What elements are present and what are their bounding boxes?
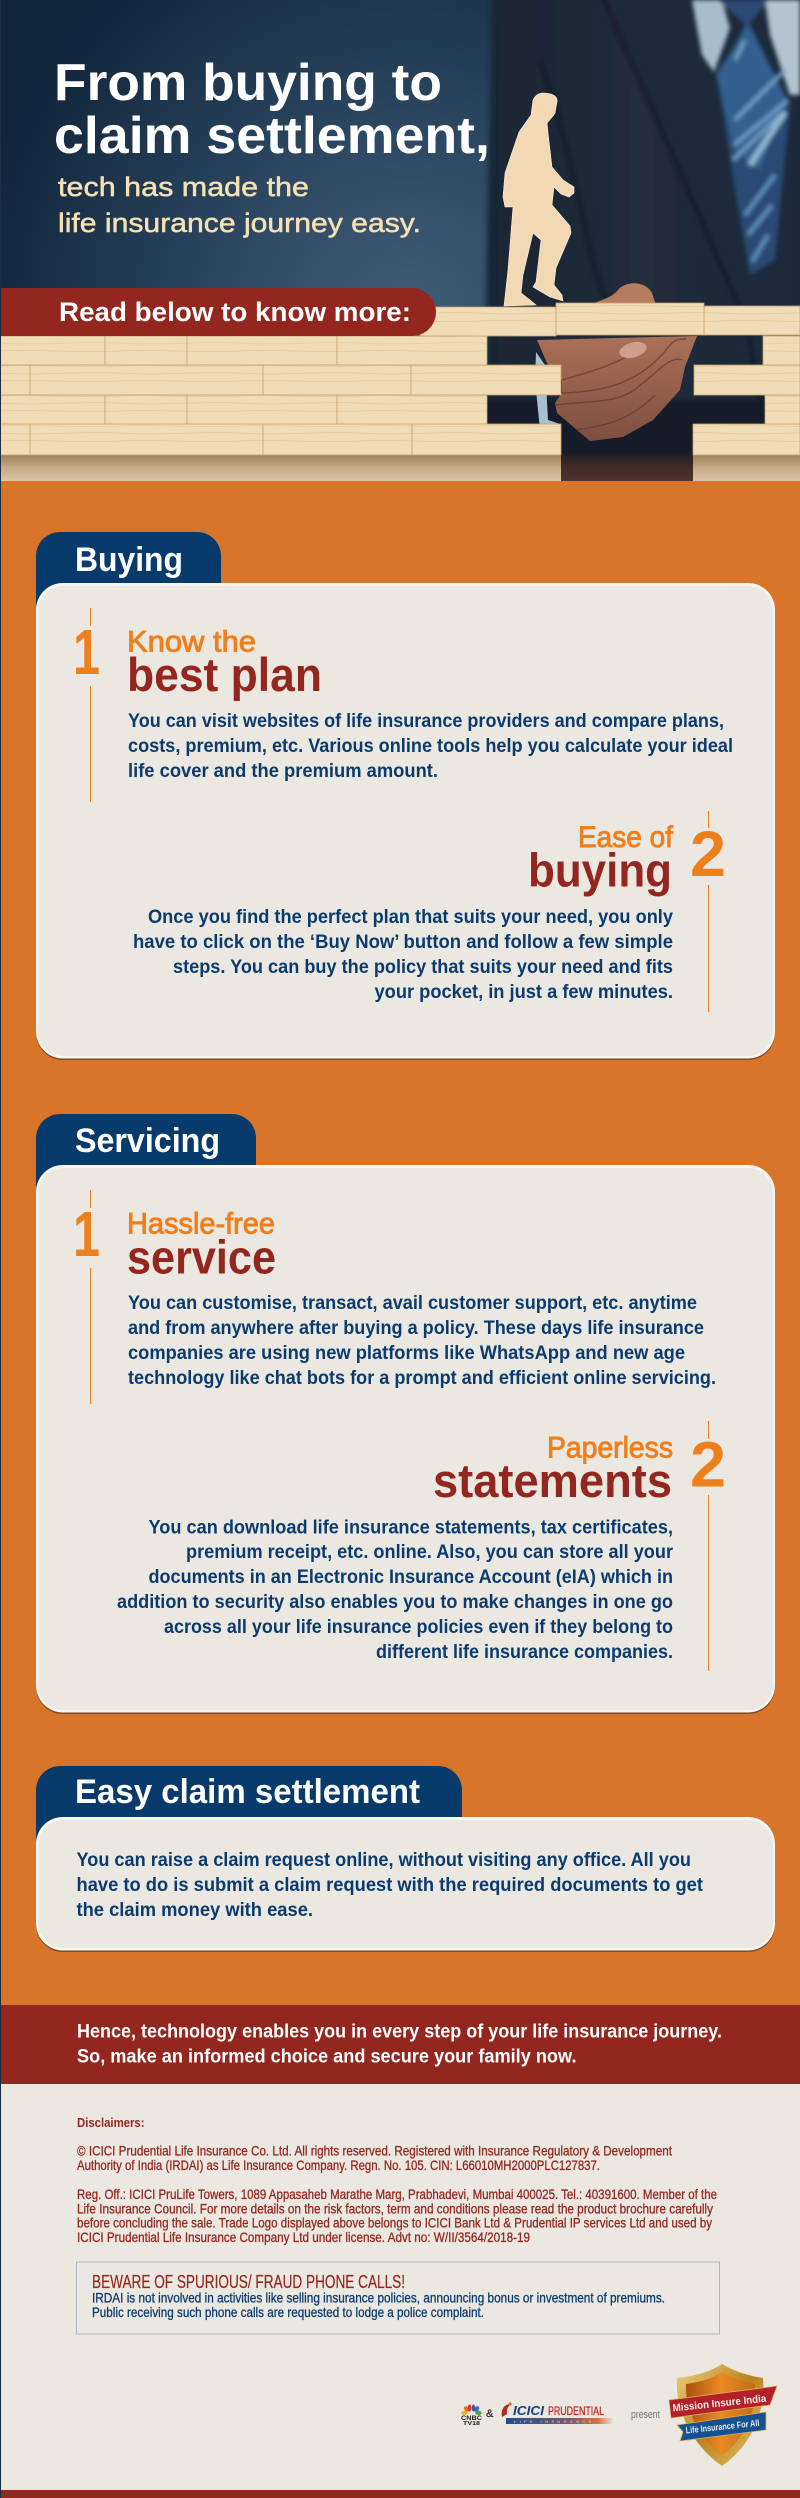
item 2: Ease of buying: 2: [690, 818, 726, 890]
ampersand: &: [486, 2408, 494, 2420]
title: [56, 62, 486, 161]
item 2: Ease of buying: steps. You can buy the policy that suits your need and fits: [173, 956, 673, 978]
item 1: Hassle-free service: and from anywhere after buying a policy. These days life insurance: [128, 1317, 704, 1339]
item 2: Paperless statements: addition to security also enables you to make changes in one go: [117, 1591, 673, 1613]
item 2: Paperless statements: statements: [433, 1454, 672, 1507]
closing message band: [0, 2005, 800, 2084]
item 2: Ease of buying: have to click on the ‘Buy Now’ button and follow a few simple: [133, 931, 673, 953]
orange background: [0, 481, 800, 2005]
fraud warning box: IRDAI is not involved in activities like selling insurance policies, announcing bonus or investment of premiums.: [92, 2290, 665, 2306]
closing message band: So, make an informed choice and secure your family now.: [77, 2046, 576, 2068]
hand behind brick: [535, 283, 697, 441]
wooden figure walking: [503, 93, 574, 306]
item 1: Hassle-free service: 1: [73, 1198, 100, 1270]
item 1: Hassle-free service: companies are using new platforms like WhatsApp and new age: [128, 1342, 685, 1364]
logo: ICICI Prudential: PRUDENTIAL: [548, 2404, 604, 2418]
card: Servicing: [36, 1165, 775, 1714]
left edge line: [0, 0, 1, 2498]
item 1: Hassle-free service: service: [127, 1230, 276, 1284]
section: Easy claim settlement: [36, 1766, 775, 1952]
item 2: Paperless statements: premium receipt, etc. online. Also, you can store all your: [186, 1541, 673, 1563]
tab: Easy claim settlement: [36, 1766, 462, 1850]
item 1: Know the best plan: Know the: [127, 626, 256, 658]
card: Easy claim settlement: [36, 1817, 775, 1952]
word: present: present: [631, 2409, 660, 2421]
copyright text: [77, 2143, 672, 2173]
section: Servicing: [36, 1114, 775, 1714]
item 2: Ease of buying: [133, 811, 726, 1012]
fraud warning box: [76, 2262, 720, 2334]
section: Buying: [36, 532, 775, 1060]
tab: Buying: [36, 532, 221, 620]
table reflection: [1, 455, 800, 481]
title: claim settlement,: [54, 107, 490, 165]
item 1: Know the best plan: life cover and the premium amount.: [128, 760, 438, 782]
item 2: Paperless statements: 2: [690, 1428, 726, 1500]
logo: CNBC TV18: TV18: [463, 2421, 480, 2427]
bottom bar: [0, 2490, 800, 2498]
item 2: Ease of buying: your pocket, in just a few minutes.: [374, 981, 673, 1003]
tab: Servicing: Servicing: [75, 1122, 220, 1160]
logo: ICICI Prudential: LIFE INSURANCE: [514, 2419, 595, 2424]
card: Buying: [36, 583, 775, 1060]
logo: ICICI Prudential: ICICI: [513, 2404, 545, 2418]
disclaimer panel: [0, 2084, 800, 2490]
item 2: Paperless statements: documents in an Electronic Insurance Account (eIA) which in: [148, 1566, 673, 1588]
logo: ICICI Prudential: [502, 2402, 614, 2424]
copyright text: © ICICI Prudential Life Insurance Co. Ltd. All rights reserved. Registered with Insurance Regulatory & Development: [77, 2143, 672, 2159]
item 2: Paperless statements: Paperless: [547, 1432, 673, 1464]
title: From buying to: [54, 54, 442, 112]
item 1: Know the best plan: You can visit websites of life insurance providers and compare plans,: [128, 710, 724, 732]
item 2: Paperless statements: You can download life insurance statements, tax certificates,: [148, 1516, 673, 1538]
subtitle: tech has made the: [58, 172, 309, 202]
fraud warning box: BEWARE OF SPURIOUS/ FRAUD PHONE CALLS!: [92, 2271, 405, 2292]
claim body text: the claim money with ease.: [76, 1899, 313, 1921]
item 1: Hassle-free service: Hassle-free: [127, 1208, 275, 1240]
item 2: Paperless statements: [117, 1421, 726, 1671]
claim body text: have to do is submit a claim request with the required documents to get: [76, 1874, 703, 1896]
fraud warning box: Public receiving such phone calls are requested to lodge a police complaint.: [92, 2304, 484, 2320]
wooden brick wall: [0, 303, 800, 455]
subtitle: life insurance journey easy.: [58, 208, 421, 238]
registered office text: [77, 2186, 717, 2245]
item 2: Ease of buying: Ease of: [578, 821, 674, 854]
item 1: Hassle-free service: technology like chat bots for a prompt and efficient online servicing.: [128, 1367, 716, 1389]
businessman suit: [482, 0, 800, 452]
shirt cuff: [536, 352, 560, 424]
thumb nail: [619, 342, 647, 358]
item 1: Hassle-free service: You can customise, transact, avail customer support, etc. anytime: [128, 1292, 697, 1314]
disclaimers heading: Disclaimers:: [77, 2115, 144, 2130]
item 1: Know the best plan: best plan: [127, 648, 322, 701]
item 1: Know the best plan: [73, 608, 733, 802]
shirt and striped tie: [692, 0, 800, 275]
item 2: Paperless statements: different life insurance companies.: [376, 1641, 673, 1663]
logo: CNBC TV18: CNBC: [461, 2415, 482, 2422]
registered office text: ICICI Prudential Life Insurance Company Ltd under license. Advt no: W/II/3564/2018-19: [77, 2229, 530, 2245]
logo: CNBC TV18: [461, 2404, 482, 2427]
item 1: Hassle-free service: [73, 1190, 716, 1404]
claim body text: [76, 1849, 703, 1921]
red ribbon: Mission Insure India: [672, 2393, 767, 2414]
claim body text: You can raise a claim request online, without visiting any office. All you: [76, 1849, 691, 1871]
tab: Servicing: [36, 1114, 256, 1200]
blue ribbon: Life Insurance For All: [685, 2418, 760, 2435]
item 2: Paperless statements: across all your life insurance policies even if they belong to: [164, 1616, 673, 1638]
item 1: Know the best plan: costs, premium, etc. Various online tools help you calculate your ideal: [128, 735, 733, 757]
finger creases: [556, 338, 686, 430]
tab: Buying: Buying: [75, 541, 183, 579]
hero photo background: [1, 0, 496, 364]
read more banner: Read below to know more:: [59, 297, 411, 327]
item 2: Ease of buying: buying: [528, 844, 672, 896]
read more banner: [0, 288, 436, 336]
closing message band: Hence, technology enables you in every step of your life insurance journey.: [77, 2021, 722, 2043]
item 2: Ease of buying: Once you find the perfect plan that suits your need, you only: [148, 906, 673, 928]
subtitle: [58, 172, 421, 238]
item 1: Know the best plan: 1: [73, 616, 100, 688]
tab: Easy claim settlement: Easy claim settlement: [75, 1773, 420, 1811]
hero banner: [0, 0, 800, 490]
copyright text: Authority of India (IRDAI) as Life Insurance Company. Regn. No. 105. CIN: L66010MH2000PLC127837.: [77, 2157, 600, 2173]
badge: Mission Insure India shield: [669, 2364, 777, 2466]
